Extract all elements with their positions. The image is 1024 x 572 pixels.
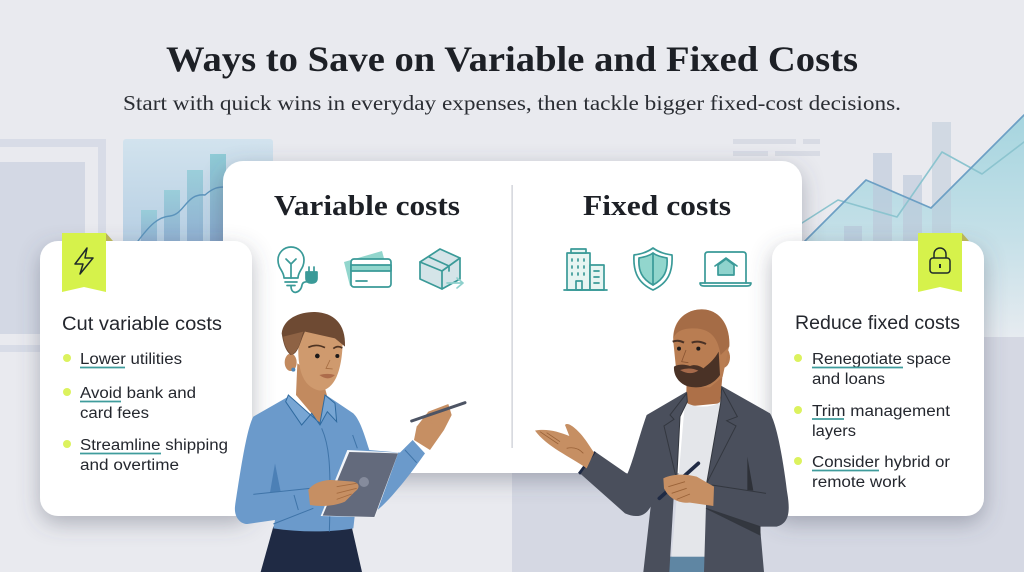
icon: shield	[634, 248, 672, 290]
background: left bar chart panel	[123, 139, 273, 249]
list item: avoid bank and card fees: card fees	[80, 405, 149, 422]
subtitle: Start with quick wins in everyday expenses, then tackle bigger fixed-cost decisions.	[123, 91, 901, 115]
list item: renegotiate space and loans: Renegotiate space	[812, 351, 951, 368]
list item: trim management layers	[794, 403, 951, 440]
panel: reduce fixed costs	[772, 233, 984, 516]
illustration: woman with tablet and pen	[235, 312, 465, 572]
list item: streamline shipping and overtime: and overtime	[80, 457, 179, 474]
title: Ways to Save on Variable and Fixed Costs	[166, 39, 858, 79]
icon: laptop with house	[700, 252, 751, 286]
list item: streamline shipping and overtime: Streamline shipping	[80, 437, 228, 454]
list item: trim management layers: layers	[812, 423, 856, 440]
heading: variable costs: Variable costs	[274, 191, 460, 222]
list item: streamline shipping and overtime	[63, 437, 228, 474]
icon: bank card	[344, 251, 391, 287]
heading: fixed costs: Fixed costs	[583, 191, 731, 222]
icon: shipping box	[420, 249, 463, 289]
list item: avoid bank and card fees	[63, 385, 196, 422]
list item: trim management layers: Trim management	[812, 403, 951, 420]
background: right line chart	[733, 115, 1024, 337]
list item: renegotiate space and loans	[794, 351, 951, 388]
list item: renegotiate space and loans: and loans	[812, 371, 885, 388]
icon: light bulb with plug	[278, 247, 317, 292]
panel: cut variable costs	[40, 233, 252, 516]
icon: bookmark with padlock	[918, 233, 969, 292]
list item: lower utilities: Lower utilities	[80, 351, 182, 368]
icon: bookmark with lightning bolt	[62, 233, 113, 292]
list item: consider hybrid or remote work	[794, 454, 950, 491]
icon: office buildings	[564, 249, 607, 290]
illustration: man gesturing with pen	[535, 309, 789, 572]
background: left window frame	[0, 139, 106, 352]
list item: avoid bank and card fees: Avoid bank and	[80, 385, 196, 402]
heading: cut variable costs: Cut variable costs	[62, 314, 222, 335]
heading: reduce fixed costs: Reduce fixed costs	[795, 313, 960, 334]
list item: consider hybrid or remote work: Consider hybrid or	[812, 454, 950, 471]
list item: consider hybrid or remote work: remote work	[812, 474, 906, 491]
panel: comparison of variable and fixed costs	[223, 161, 802, 473]
